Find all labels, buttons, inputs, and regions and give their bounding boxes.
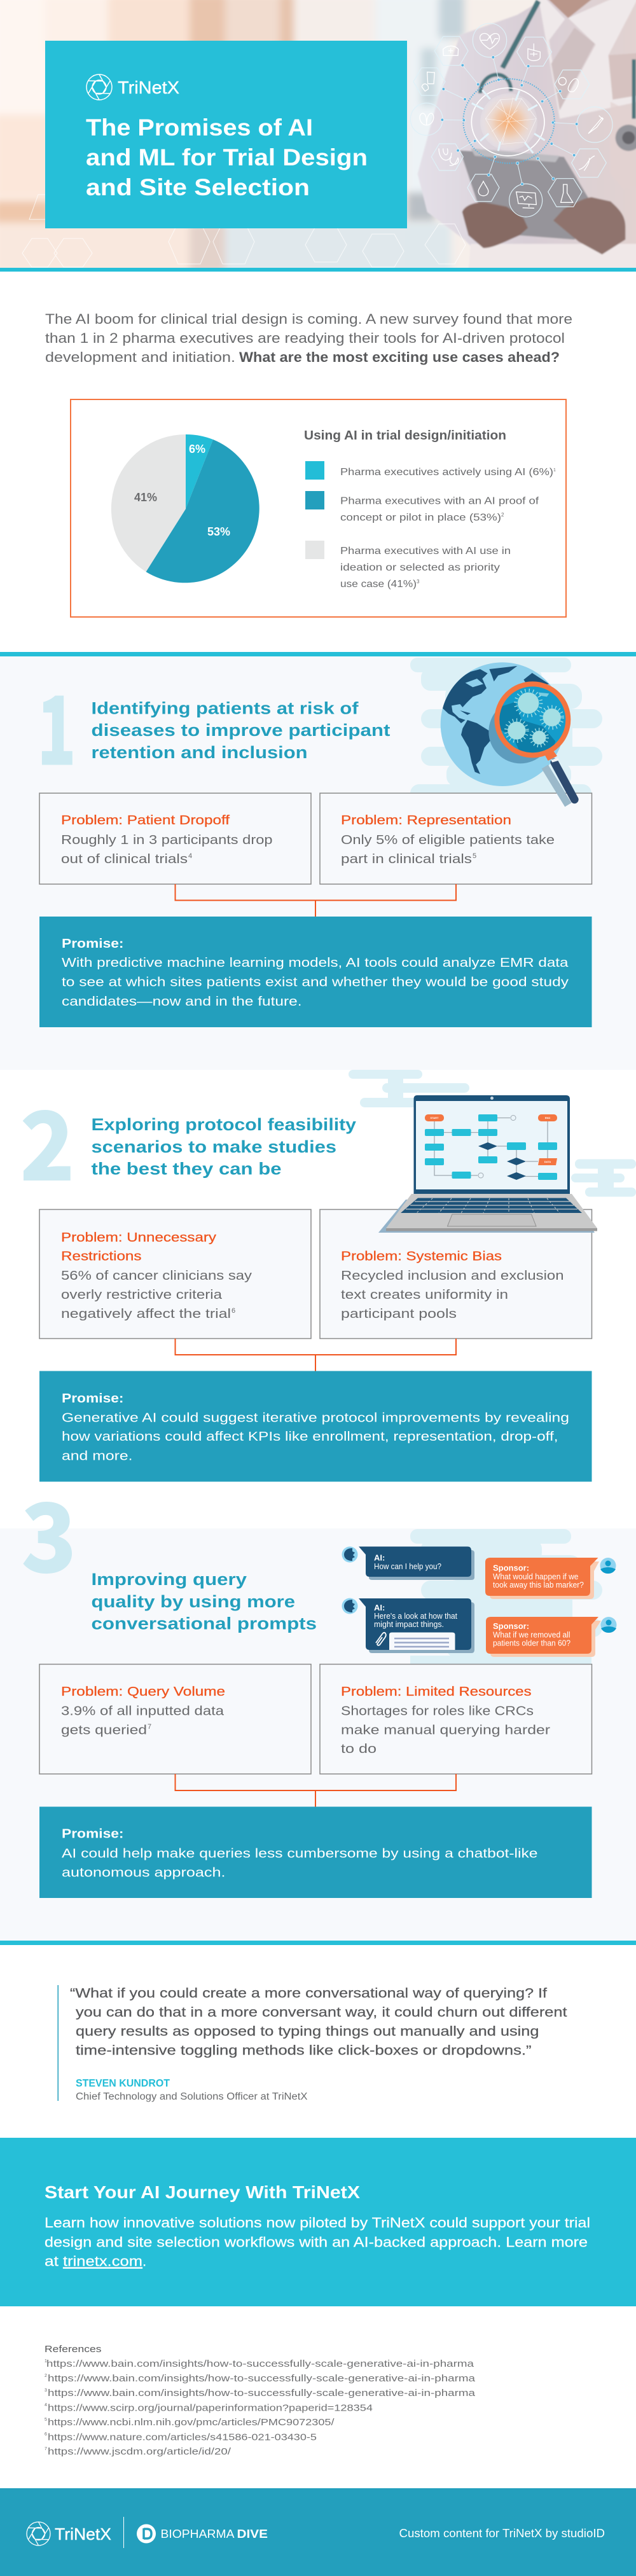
pie chart: 41%	[134, 491, 157, 504]
title: and Site Selection	[86, 174, 310, 200]
logo: BioPharma Dive	[137, 2524, 268, 2543]
icon: laptop with flowchart: START	[430, 1116, 439, 1119]
icon: globe with magnifying glass	[441, 662, 574, 805]
hero bottom strip	[0, 268, 636, 272]
promise box: how variations could affect KPIs like enrollment, representation, drop-off,	[62, 1429, 558, 1444]
promise box: With predictive machine learning models, AI tools could analyze EMR data	[62, 955, 569, 970]
icon: sponsor avatar	[600, 1558, 616, 1574]
title panel	[45, 41, 407, 228]
problem box: representation: 5	[473, 852, 476, 860]
problem box: unnecessary restrictions: Restrictions	[61, 1249, 141, 1263]
panel: section 1	[39, 658, 602, 1027]
chat bubble: AI answer with document: Here's a look at how that	[374, 1611, 457, 1621]
title: The Promises of AI	[86, 114, 313, 141]
call to action panel: design and site selection workflows with an AI-backed approach. Learn more	[45, 2234, 588, 2250]
heading: quality by using more	[92, 1592, 295, 1611]
call to action panel: Start Your AI Journey With TriNetX	[45, 2182, 360, 2202]
problem box: patient dropoff: Problem: Patient Dropoff	[61, 813, 230, 828]
problem box: limited resources: Problem: Limited Resources	[341, 1684, 532, 1699]
references: 6	[45, 2432, 47, 2437]
pie chart	[111, 434, 259, 583]
problem box: patient dropoff: Roughly 1 in 3 participants drop	[61, 833, 272, 847]
references: 7	[45, 2447, 47, 2451]
call to action panel	[0, 2138, 636, 2306]
cloud backdrop	[349, 1070, 636, 1197]
quote: you can do that in a more conversant way, it could churn out different	[76, 2005, 567, 2020]
logo: TriNetX	[27, 2522, 111, 2545]
hero photo background	[0, 0, 538, 268]
cloud backdrop	[410, 658, 602, 803]
promise box: candidates—now and in the future.	[62, 994, 301, 1009]
panel: AI usage pie chart	[71, 399, 566, 617]
promise box: Promise:	[62, 1827, 123, 1841]
chat illustration	[342, 1547, 617, 1657]
credit: Custom content for TriNetX by studioID	[399, 2527, 605, 2540]
problem box: limited resources: to do	[341, 1742, 377, 1756]
title	[86, 114, 368, 200]
references: https://www.nature.com/articles/s41586-021-03430-5	[48, 2432, 317, 2442]
call to action panel: Learn how innovative solutions now piloted by TriNetX could support your trial	[45, 2215, 590, 2231]
problem box: patient dropoff: out of clinical trials	[61, 852, 188, 866]
heading	[92, 1115, 356, 1178]
connector	[176, 1774, 456, 1806]
cloud backdrop	[410, 1529, 602, 1665]
problem box: patient dropoff	[39, 793, 311, 884]
icon: sponsor avatar	[600, 1617, 617, 1633]
chat bubble: sponsor question 2: patients older than 60?	[493, 1638, 570, 1647]
logo: TriNetX	[86, 74, 179, 100]
references: https://www.ncbi.nlm.nih.gov/pmc/articles/PMC9072305/	[48, 2417, 335, 2428]
problem box: representation	[320, 793, 591, 884]
heading: scenarios to make studies	[92, 1137, 336, 1156]
problem box: limited resources: make manual querying harder	[341, 1722, 550, 1738]
heading: Exploring protocol feasibility	[92, 1115, 356, 1134]
problem box: unnecessary restrictions: 6	[232, 1307, 235, 1315]
medical icon glyphs	[420, 34, 603, 208]
intro text: development and initiation.	[45, 349, 235, 365]
legend: concept or pilot in place (53%)	[340, 513, 501, 523]
problem box: query volume: gets queried	[61, 1722, 147, 1738]
references: https://www.jscdm.org/article/id/20/	[48, 2446, 232, 2457]
legend: 2	[501, 512, 504, 518]
references: 2	[45, 2374, 47, 2378]
section divider strip	[0, 1941, 636, 1945]
hero banner	[0, 0, 636, 274]
chat bubble: AI greeting: How can I help you?	[374, 1562, 441, 1571]
promise box	[39, 917, 591, 1027]
quote: “What if you could create a more conversational way of querying? If	[70, 1986, 547, 2001]
problem box: representation: Only 5% of eligible patients take	[341, 833, 555, 847]
quote: query results as opposed to typing things out manually and using	[76, 2024, 539, 2039]
problem box: unnecessary restrictions: 56% of cancer clinicians say	[61, 1268, 252, 1283]
call to action panel: at	[45, 2253, 59, 2269]
problem box: unnecessary restrictions: negatively affect the trial	[61, 1306, 231, 1321]
intro text: than 1 in 2 pharma executives are readying their tools for AI-driven protocol	[45, 330, 565, 346]
problem box: unnecessary restrictions	[39, 1210, 311, 1338]
legend: use case (41%)	[340, 579, 417, 590]
problem box: systemic bias	[320, 1210, 591, 1338]
problem box: query volume: Problem: Query Volume	[61, 1684, 225, 1699]
heading: diseases to improve participant	[92, 721, 391, 740]
intro text	[45, 311, 572, 365]
document attachment	[389, 1632, 455, 1650]
icon: laptop with flowchart	[378, 1095, 597, 1233]
faint hexagon pattern	[22, 195, 466, 267]
connector	[176, 1338, 456, 1371]
references: 3	[45, 2388, 47, 2393]
heading: Improving query	[92, 1570, 247, 1589]
icon: paperclip	[376, 1633, 386, 1645]
heading: Identifying patients at risk of	[92, 698, 359, 717]
chat bubble: AI answer with document: might impact things.	[374, 1619, 444, 1629]
heading: the best they can be	[92, 1159, 281, 1178]
logo: BioPharma Dive: BIOPHARMA	[160, 2528, 234, 2540]
promise box	[39, 1806, 591, 1898]
chat bubble: sponsor question 2: What if we removed all	[493, 1630, 570, 1640]
problem box: query volume: 3.9% of all inputted data	[61, 1703, 225, 1719]
intro text: The AI boom for clinical trial design is coming. A new survey found that more	[45, 311, 572, 327]
panel: section 2	[20, 1070, 636, 1482]
chat bubble: AI answer with document	[359, 1598, 474, 1653]
heading: conversational prompts	[92, 1614, 317, 1633]
quote: STEVEN KUNDROT	[76, 2077, 170, 2089]
promise box: autonomous approach.	[62, 1865, 225, 1880]
problem box: systemic bias: participant pools	[341, 1306, 457, 1321]
promise box: Promise:	[62, 1391, 123, 1406]
references: References	[45, 2344, 102, 2355]
problem box: query volume: 7	[148, 1723, 151, 1731]
references: 1	[45, 2359, 47, 2364]
references: 4	[45, 2403, 47, 2407]
legend: Pharma executives with AI use in	[340, 546, 511, 557]
references: https://www.bain.com/insights/how-to-successfully-scale-generative-ai-in-pharma	[48, 2373, 476, 2384]
chat bubble: sponsor question 1: Sponsor:	[493, 1563, 529, 1572]
logo: BioPharma Dive: DIVE	[237, 2528, 268, 2540]
legend: ideation or selected as priority	[340, 562, 500, 573]
quote: Chief Technology and Solutions Officer at TriNetX	[76, 2091, 308, 2102]
problem box: representation: part in clinical trials	[341, 852, 472, 866]
number 1: 1	[37, 655, 76, 793]
call to action panel: .	[142, 2253, 146, 2269]
pie chart: 53%	[207, 525, 230, 538]
problem box: limited resources	[320, 1664, 591, 1774]
problem box: systemic bias: text creates uniformity in	[341, 1287, 508, 1302]
promise box: Generative AI could suggest iterative protocol improvements by revealing	[62, 1411, 569, 1425]
legend: Pharma executives actively using AI (6%)	[340, 467, 553, 478]
chat bubble: AI greeting: AI:	[374, 1553, 385, 1562]
chat bubble: AI greeting	[359, 1547, 474, 1580]
legend: 3	[417, 579, 420, 585]
number 3: 3	[21, 1462, 77, 1600]
heading	[92, 698, 391, 762]
references: 5	[45, 2418, 47, 2422]
problem box: systemic bias: Recycled inclusion and exclusion	[341, 1268, 563, 1283]
promise box	[39, 1371, 591, 1482]
section divider strip	[0, 652, 636, 656]
quote: time-intensive toggling methods like click-boxes or dropdowns.”	[76, 2043, 532, 2058]
legend: Pharma executives with an AI proof of	[340, 496, 539, 506]
network nodes	[441, 56, 578, 186]
references: https://www.bain.com/insights/how-to-successfully-scale-generative-ai-in-pharma	[48, 2388, 476, 2399]
chat bubble: sponsor question 1: took away this lab marker?	[493, 1580, 584, 1589]
flowchart nodes	[425, 1114, 557, 1180]
problem box: unnecessary restrictions: overly restrictive criteria	[61, 1287, 223, 1302]
promise box: and more.	[62, 1449, 132, 1463]
references	[45, 2344, 476, 2457]
problem box: query volume	[39, 1664, 311, 1774]
problem box: unnecessary restrictions: Problem: Unnecessary	[61, 1230, 217, 1245]
panel: section 3	[0, 1462, 636, 1941]
number 2: 2	[20, 1070, 75, 1208]
references: https://www.scirp.org/journal/paperinformation?paperid=128354	[48, 2403, 373, 2413]
icon: laptop with flowchart: DATA	[544, 1160, 551, 1163]
icon: AI avatar	[342, 1598, 357, 1614]
references: https://www.bain.com/insights/how-to-successfully-scale-generative-ai-in-pharma	[46, 2358, 474, 2369]
promise box: Promise:	[62, 936, 123, 951]
footer	[0, 2488, 636, 2576]
flowchart lines	[434, 1118, 548, 1177]
problem box: limited resources: Shortages for roles like CRCs	[341, 1703, 534, 1719]
title: and ML for Trial Design	[86, 144, 368, 170]
legend	[304, 429, 556, 590]
heading	[92, 1570, 317, 1633]
pie chart: 6%	[189, 443, 205, 455]
connector	[176, 884, 456, 917]
promise box: to see at which sites patients exist and whether they would be good study	[62, 974, 569, 990]
icon: laptop with flowchart: END	[545, 1116, 550, 1119]
call to action panel: trinetx.com	[63, 2253, 142, 2269]
logo: TriNetX: TriNetX	[55, 2524, 111, 2544]
chat bubble: sponsor question 2: Sponsor:	[493, 1621, 529, 1631]
legend: 1	[553, 468, 556, 473]
problem box: systemic bias: Problem: Systemic Bias	[341, 1249, 502, 1263]
chat bubble: sponsor question 1	[485, 1558, 599, 1599]
promise box: AI could help make queries less cumbersome by using a chatbot-like	[62, 1846, 538, 1861]
doctor with tablet	[410, 0, 636, 269]
logo: TriNetX: TriNetX	[118, 78, 179, 97]
problem box: representation: Problem: Representation	[341, 813, 511, 828]
intro text: What are the most exciting use cases ahead?	[239, 349, 560, 365]
chat bubble: sponsor question 2	[486, 1617, 601, 1657]
network overlay with medical icons	[410, 24, 612, 217]
icon: AI avatar	[342, 1547, 357, 1562]
quote	[57, 1985, 567, 2102]
legend: Using AI in trial design/initiation	[304, 429, 506, 443]
chat bubble: sponsor question 1: What would happen if we	[493, 1572, 579, 1581]
heading: retention and inclusion	[92, 743, 308, 762]
problem box: patient dropoff: 4	[188, 852, 192, 860]
chat bubble: AI answer with document: AI:	[374, 1603, 385, 1612]
